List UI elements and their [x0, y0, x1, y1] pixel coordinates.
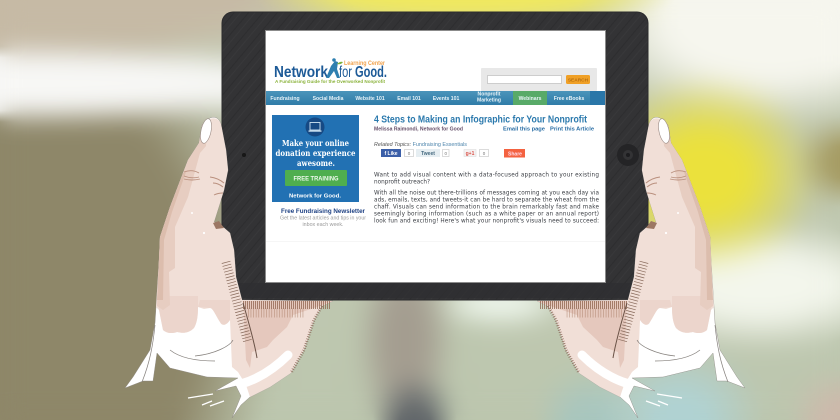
cuff fray [188, 394, 224, 406]
thenar hatching [226, 262, 248, 343]
banner headline: donation experience [276, 149, 356, 159]
banner headline: awesome. [297, 159, 335, 169]
hand silhouette [125, 117, 333, 418]
nav labels: Free eBooks [554, 96, 584, 102]
logo word for Good: for Good. [339, 64, 387, 81]
article links: Email this page [503, 126, 545, 132]
screen [266, 30, 606, 282]
palm hatching [243, 301, 330, 309]
nav labels: Webinars [519, 96, 542, 102]
google plus: g+1 [466, 151, 475, 157]
body paragraph: ads, emails, texts, and tweets-it can be hard to separate the wheat from the [374, 197, 600, 203]
highlights [191, 212, 205, 234]
logo [274, 58, 387, 85]
free training button: FREE TRAINING [294, 176, 339, 182]
article title: 4 Steps to Making an Infographic for Your Nonprofit [374, 114, 587, 126]
facebook like: f Like [384, 151, 398, 157]
thumb web [213, 221, 224, 229]
nav end section [590, 91, 605, 105]
nav labels: Email 101 [397, 96, 421, 102]
bezel streaks [225, 283, 645, 298]
intro paragraph [374, 172, 599, 185]
nav labels: Nonprofit [478, 92, 501, 98]
google plus: 0 [483, 151, 486, 156]
banner icon [306, 118, 324, 136]
banner logo: Network for Good. [289, 194, 341, 200]
banner headline [276, 139, 356, 169]
nav labels: Social Media [313, 96, 344, 102]
navigation bar [266, 91, 605, 105]
search button: SEARCH [568, 78, 589, 84]
palm shade [243, 301, 333, 368]
left sensor dot [242, 153, 246, 157]
home button [617, 144, 639, 166]
palm outer hatching [291, 306, 322, 373]
left hand [125, 117, 333, 418]
logo word Network: Network [274, 64, 328, 81]
body paragraph: With all the noise out there-trillions of messages coming at you each day via [374, 190, 599, 196]
nav labels: Fundraising [270, 96, 300, 102]
nav labels: Website 101 [355, 96, 385, 102]
facebook like: 0 [408, 151, 411, 156]
byline: Melissa Raimondi, Network for Good [374, 126, 463, 132]
tablet body [222, 12, 648, 300]
thumb creases [184, 171, 224, 195]
google plus [464, 150, 488, 157]
search panel [481, 68, 597, 91]
logo tagline: A Fundraising Guide for the Overworked Nonprofit [275, 79, 385, 85]
nav labels: Events 101 [433, 96, 459, 102]
upper palm hatching [248, 308, 305, 318]
tablet [222, 12, 648, 300]
body paragraph: chaff. Visuals can send information to the brain remarkably fast and make [374, 204, 600, 210]
tweet: 0 [444, 151, 447, 156]
tweet: Tweet [421, 151, 435, 157]
body paragraph: seemingly boring information (such as a white paper or an annual report) [374, 211, 599, 217]
right hand [537, 117, 745, 418]
scalloped skin shade [157, 296, 230, 333]
article links: Print this Article [550, 126, 594, 132]
webinars tab [513, 91, 547, 105]
body paragraph: look fun and exciting! Here's what your nonprofit's visuals need to succeed: [374, 218, 599, 224]
social buttons [381, 149, 525, 158]
newsletter block [280, 208, 366, 222]
light skin [156, 118, 333, 397]
nav labels [270, 92, 584, 104]
logo figure [326, 58, 343, 78]
article links [503, 126, 594, 132]
related topics: Related Topics: Fundraising Essentials [374, 142, 467, 148]
thumb edge shade [157, 172, 186, 300]
facebook like [381, 149, 414, 157]
body paragraph [374, 190, 600, 224]
donation banner [272, 115, 359, 202]
thumb side shade [157, 126, 207, 310]
banner headline: Make your online [282, 139, 349, 149]
share [504, 149, 525, 158]
thenar crease [243, 303, 257, 358]
search input [488, 76, 562, 84]
tweet [416, 149, 449, 157]
share: Share [508, 151, 522, 157]
newsletter copy: Get the latest articles and tips in your [280, 216, 366, 222]
thumb nail [199, 118, 213, 144]
newsletter heading: Free Fundraising Newsletter [281, 208, 366, 215]
logo Learning Center: Learning Center [344, 61, 386, 67]
nav labels: Marketing [477, 98, 501, 104]
white palm band [241, 355, 288, 384]
newsletter copy second line: inbox each week. [302, 222, 344, 228]
wrist lines [142, 325, 233, 382]
intro paragraph: Want to add visual content with a data-focused approach to your existing [374, 172, 599, 178]
intro paragraph: nonprofit outreach? [374, 179, 430, 185]
